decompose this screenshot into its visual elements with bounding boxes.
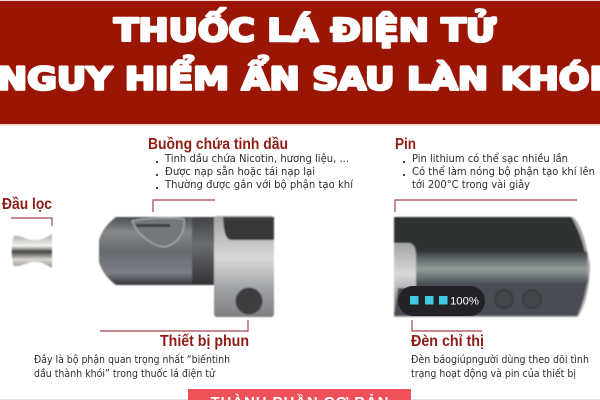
indicator display: 100% [450,296,479,308]
bullet list: oil chamber: Tinh dầu chứa Nicotin, hương liệu, ... [164,153,349,165]
title line 2: NGUY HIỂM ẨN SAU LÀN KHÓI [0,56,600,98]
tank window [132,218,184,247]
indicator display [398,286,485,316]
spray button [236,288,262,314]
bullet list: battery: Có thể làm nóng bộ phận tạo khí lên [412,165,595,178]
label block: atomizer: Thiết bị phun [160,333,249,350]
label block: atomizer [34,320,249,380]
description: atomizer: dầu thành khói” trong thuốc lá điện tử [34,368,215,380]
description: indicator light: trạng hoạt động và pin của thiết bị [411,368,576,380]
description: indicator light [411,354,589,380]
section heading: basic components [188,389,411,400]
bullet list: oil chamber: . [155,180,159,192]
bullet list: battery: tới 200°C trong vài giây [412,179,530,191]
label block: battery [395,136,595,212]
bullet list: oil chamber: Thường được gắn với bộ phận tạo khí [164,178,354,191]
label block: indicator light: Đèn chỉ thị [411,333,484,350]
bullet list: battery: . [402,167,406,179]
label: filter tip [2,196,52,226]
bottom strip [0,399,600,400]
label block: oil chamber: Buồng chứa tinh dầu [148,136,288,153]
bullet list: battery: . [402,154,406,166]
description: atomizer: Đây là bộ phận quan trọng nhất “biếntinh [34,354,230,366]
icon: filter tip [12,234,52,268]
bullet list: oil chamber: . [155,154,159,166]
bullet list: oil chamber: Được nạp sẵn hoặc tái nạp lại [165,165,315,178]
side buttons [495,290,513,308]
bullet list: oil chamber [155,153,354,192]
bullet list: battery [402,152,595,191]
device: atomizer and tank [99,216,274,317]
label block: battery: Pin [395,136,416,153]
bullet list: battery: Pin lithium có thể sạc nhiều lần [412,152,568,165]
bullet list: oil chamber: . [155,167,159,179]
label: filter tip: Đầu lọc [2,196,52,213]
description: atomizer [34,354,230,380]
label block: oil chamber [148,136,354,212]
label block: indicator light [411,320,589,380]
title line 1: THUỐC LÁ ĐIỆN TỬ [114,8,496,49]
title banner [0,0,600,126]
description: indicator light: Đèn báogiúpngười dùng theo dõi tình [411,354,589,366]
device: battery body [394,217,590,317]
